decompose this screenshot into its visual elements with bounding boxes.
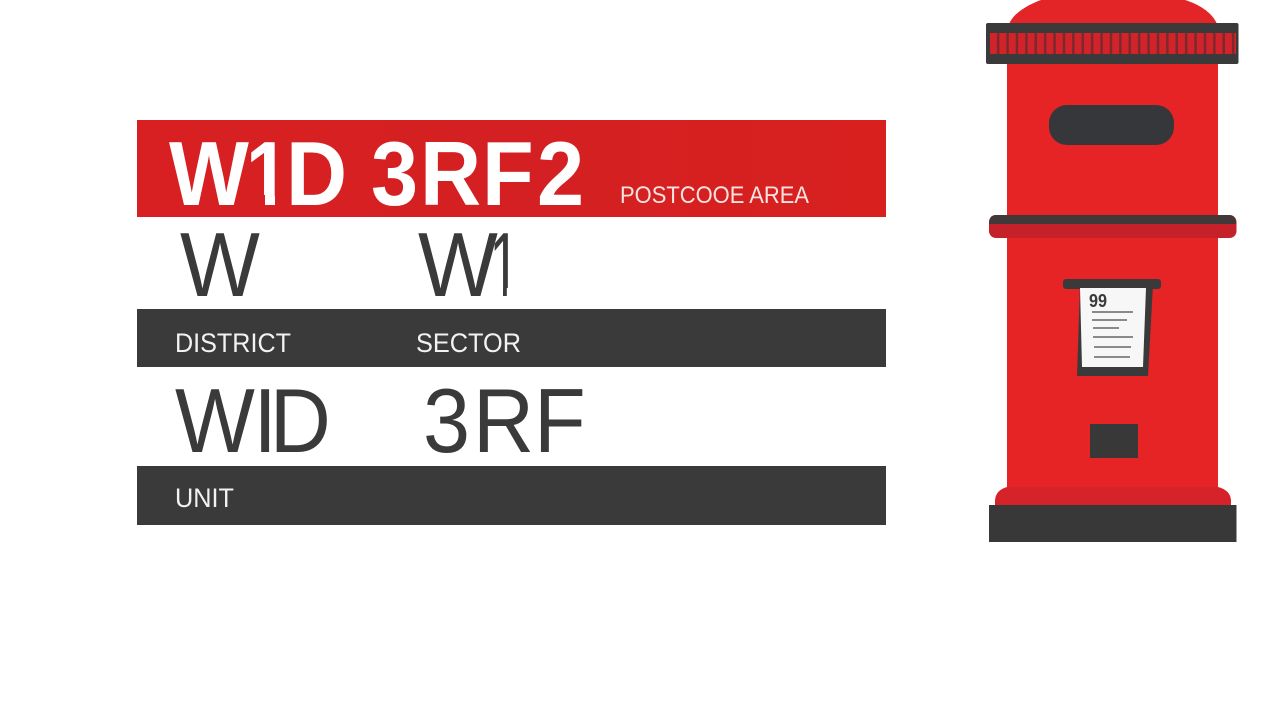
code: sector: 1	[490, 215, 520, 316]
code: sector: W	[418, 213, 498, 316]
post box dome	[1009, 0, 1217, 24]
code: unit left: WID	[175, 369, 331, 472]
heading band: full postcode: 1	[246, 124, 289, 225]
label bar: district and sector: DISTRICT	[175, 328, 291, 358]
code: district: W	[180, 213, 260, 316]
label bar: unit: UNIT	[175, 483, 234, 513]
label bar: district and sector: SECTOR	[416, 328, 521, 358]
label bar: unit	[137, 466, 886, 525]
icon: red post box	[986, 0, 1238, 542]
code: sector	[418, 233, 508, 296]
heading band: full postcode	[137, 120, 886, 225]
label bar: district and sector	[137, 309, 886, 367]
post box cap band	[986, 23, 1238, 64]
heading band: full postcode: POSTCOOE AREA	[620, 182, 809, 209]
heading band: full postcode: D3RF2	[286, 122, 584, 225]
post box letter slot	[1049, 105, 1174, 145]
post box base flare	[995, 487, 1231, 506]
post box small door	[1090, 424, 1138, 458]
post box middle band	[989, 215, 1236, 238]
code: unit right: 3RF	[423, 369, 586, 472]
post box body	[1007, 60, 1218, 492]
post box notice plate: 99	[1089, 291, 1107, 311]
heading band: full postcode: W	[169, 122, 249, 225]
post box notice plate	[1063, 279, 1161, 376]
post box plinth	[989, 505, 1236, 542]
panel: postcode breakdown	[137, 120, 886, 525]
